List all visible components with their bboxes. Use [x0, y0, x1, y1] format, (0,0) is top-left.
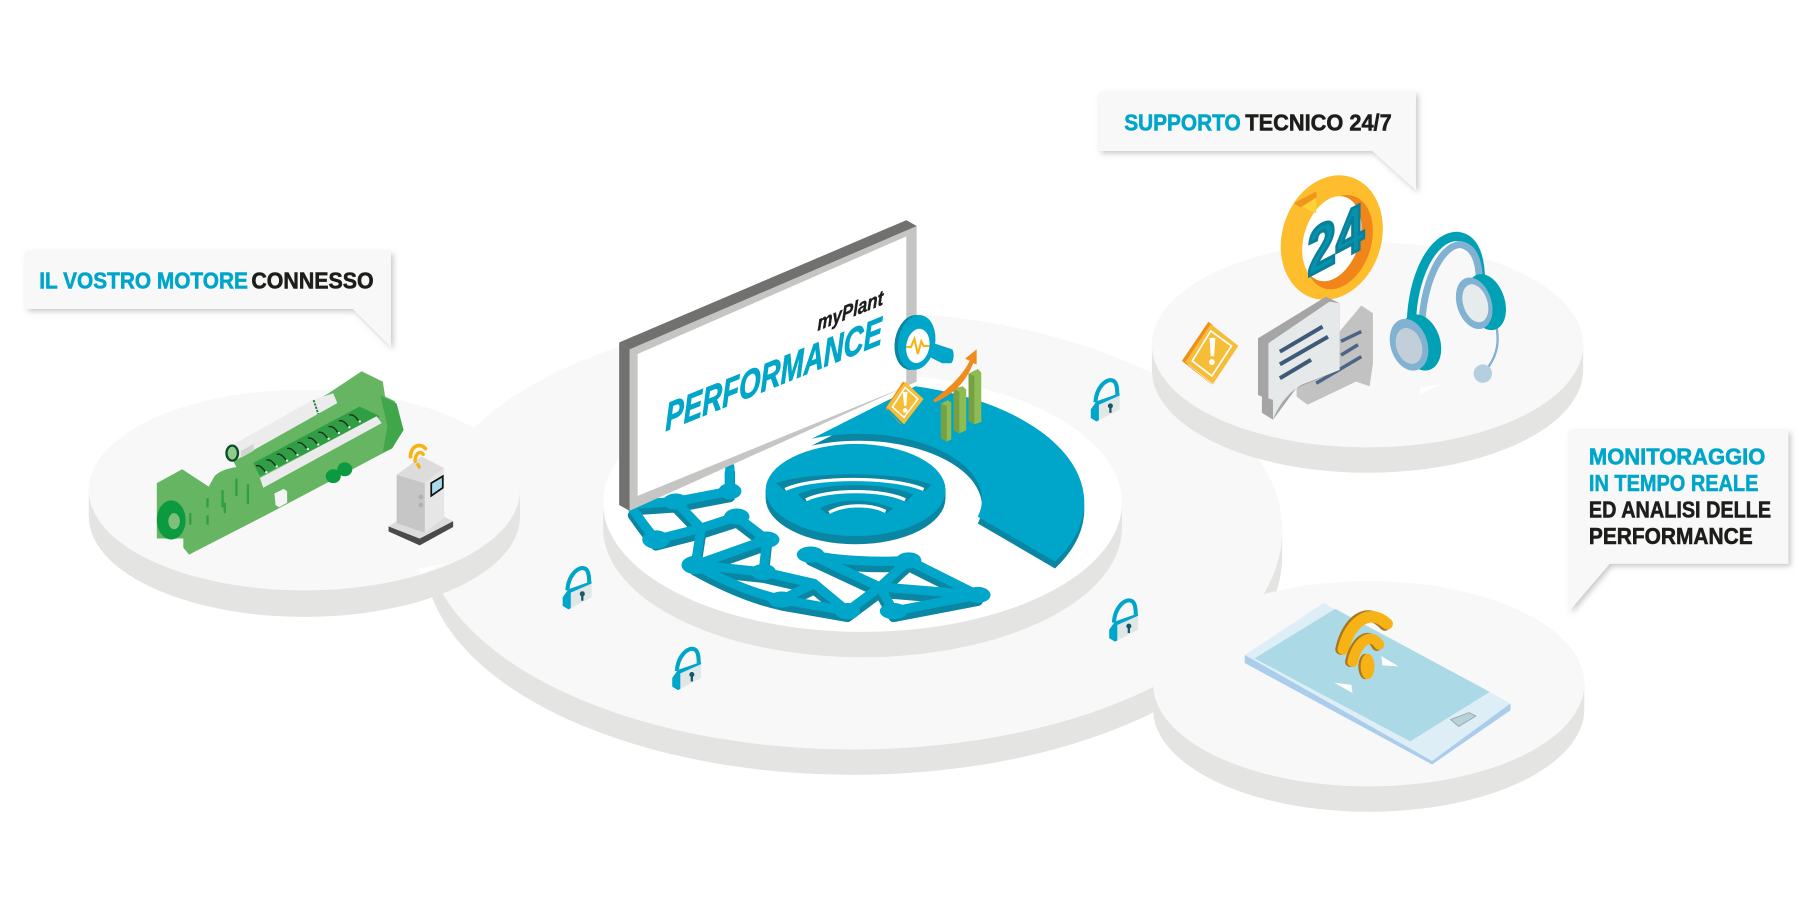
callout: supporto tecnico: SUPPORTO	[1124, 109, 1241, 135]
icon: padlock left	[563, 568, 592, 609]
ring arrowhead	[1294, 191, 1316, 213]
monitor logo: myPlant: myPlant	[818, 285, 884, 336]
network shadow	[633, 473, 978, 617]
engine junction box	[274, 489, 287, 507]
icon: chat bubbles	[1258, 297, 1373, 420]
engine feet	[326, 462, 352, 483]
callout: monitoraggio: ED ANALISI DELLE	[1589, 497, 1771, 523]
wifi arcs	[776, 474, 932, 514]
engine lower pipe	[260, 416, 382, 488]
icon: 24 hour ring	[1265, 162, 1399, 313]
icon: magnifier	[890, 312, 954, 373]
engine flywheel	[157, 500, 186, 540]
network strokes	[633, 467, 978, 611]
engine cylinder bank	[253, 406, 380, 476]
callout: monitoraggio: IN TEMPO REALE	[1589, 470, 1758, 496]
engine cylinders	[256, 415, 359, 472]
wifi disc	[766, 444, 946, 544]
engine body	[157, 371, 403, 555]
callout: supporto tecnico: TECNICO 24/7	[1245, 109, 1392, 135]
callout: supporto tecnico	[1099, 92, 1416, 190]
headset band	[1411, 236, 1481, 323]
phone glints	[1334, 656, 1399, 693]
network mesh	[633, 467, 990, 619]
callout: monitoraggio	[1569, 430, 1788, 611]
icon: padlock bottom right	[1109, 600, 1138, 642]
callout: il vostro motore connesso	[25, 251, 391, 347]
icon: padlock bottom	[672, 649, 701, 690]
left cup	[1393, 309, 1448, 376]
icon: padlock top right	[1091, 380, 1120, 421]
network nodes	[642, 483, 990, 619]
cabinet wifi	[410, 445, 425, 467]
callout: il vostro motore connesso: IL VOSTRO MOTORE	[39, 267, 248, 293]
callout: il vostro motore connesso: CONNESSO	[251, 267, 374, 293]
engine	[157, 371, 404, 555]
callout: monitoraggio: PERFORMANCE	[1589, 523, 1753, 549]
monitor logo: PERFORMANCE: PERFORMANCE	[665, 308, 883, 440]
callout: monitoraggio: MONITORAGGIO	[1589, 444, 1765, 470]
control cabinet	[389, 445, 453, 545]
mic arm	[1485, 323, 1498, 371]
platform: engine disc	[89, 390, 520, 617]
24 label: 24	[1308, 189, 1364, 291]
smartphone	[1245, 603, 1511, 764]
cabinet screen	[431, 476, 443, 496]
icon: growth bars	[933, 349, 981, 442]
phone wifi	[1341, 616, 1387, 662]
monitor	[619, 220, 917, 511]
blue arc segment	[812, 386, 1084, 568]
growth arrow	[933, 349, 977, 402]
platform: inner white disc	[603, 374, 1122, 657]
right cup	[1460, 269, 1513, 335]
icon: headset	[1383, 236, 1513, 383]
phone screen	[1255, 609, 1490, 741]
engine upper pipe	[227, 393, 337, 460]
platform: smartphone disc	[1153, 581, 1584, 812]
platform: large central disc	[424, 311, 1282, 775]
platform: support disc	[1152, 242, 1583, 473]
icon: right warning diamond	[1182, 322, 1238, 385]
back bubble	[1297, 306, 1373, 405]
phone home button	[1451, 713, 1476, 726]
icon: warning diamond	[886, 382, 924, 424]
front bubble	[1258, 297, 1340, 420]
